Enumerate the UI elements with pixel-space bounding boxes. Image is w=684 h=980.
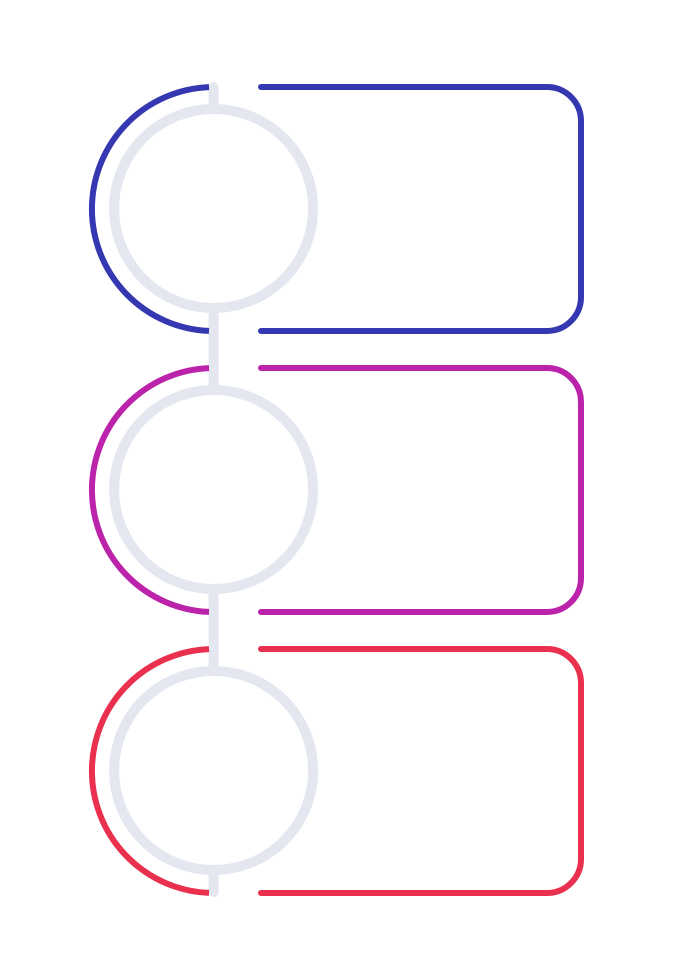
step 1 arc: [92, 87, 209, 331]
step 3: [92, 649, 581, 893]
timeline stem connecting circles: [209, 87, 219, 892]
step 2 text panel outline: [261, 368, 581, 612]
step 3 circle: [114, 671, 313, 870]
step 2 arc: [92, 368, 209, 612]
step 3 text panel outline: [261, 649, 581, 893]
step 1: [92, 87, 581, 331]
step 2: [92, 368, 581, 612]
step 1 text panel outline: [261, 87, 581, 331]
step 2 circle: [114, 390, 313, 589]
step 3 arc: [92, 649, 209, 893]
step 1 circle: [114, 109, 313, 308]
